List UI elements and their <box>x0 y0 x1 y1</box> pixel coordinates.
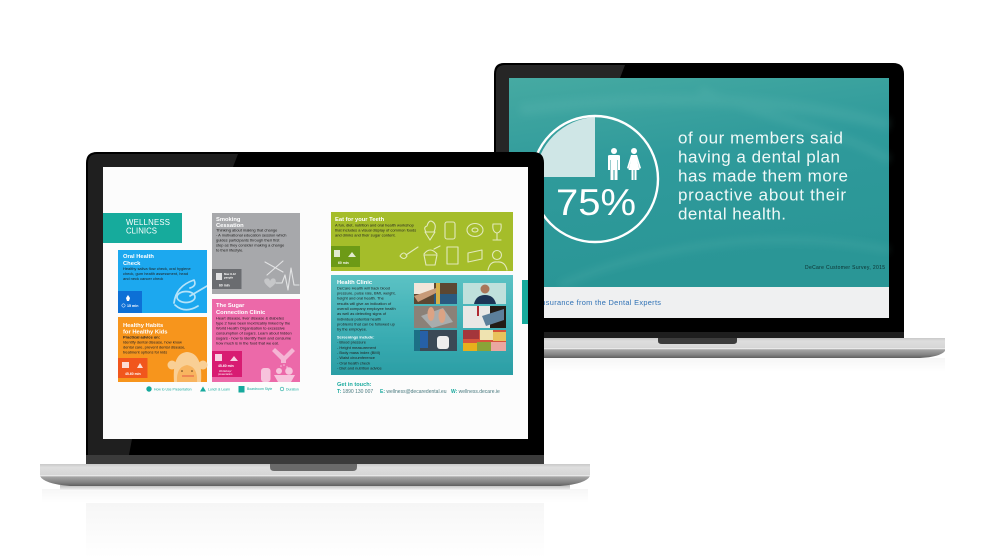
panel: health clinic: - Diet and nutrition advice <box>337 366 382 370</box>
background swooshes <box>520 90 889 285</box>
panel: oral health check <box>118 250 207 313</box>
icon: child face <box>168 352 208 382</box>
icon: sugar pouring into bowl <box>261 348 295 382</box>
front laptop <box>40 152 590 486</box>
panel: eat for your teeth: and drinks and their sugar content. <box>335 232 396 238</box>
statement text: has made them more <box>678 166 848 185</box>
panel: health clinic <box>331 275 513 375</box>
panel: health clinic: DeCare Health will track blood <box>337 286 390 290</box>
icon: woman <box>627 148 641 180</box>
panel: eat for your teeth: A fun, diet, nutrition and oral health workshop <box>335 222 415 228</box>
panel: health clinic: Health Clinic <box>337 280 373 286</box>
photo: shopping <box>414 330 457 351</box>
panel: oral health check: and neck cancer check <box>123 276 163 281</box>
statement text: dental health. <box>678 204 786 223</box>
pie chart: 75 percent <box>532 116 658 242</box>
photo: blood pressure check <box>463 306 506 328</box>
panel: smoking cessation: guides participants through their first <box>216 238 280 242</box>
panel: health clinic: pressure, pulse rate, BMI, weight, <box>337 290 396 296</box>
side tab <box>522 280 528 324</box>
photo: waist measurement <box>414 283 457 304</box>
panel: healthy habits for healthy kids: Practical advice on: <box>123 334 160 340</box>
panel: health clinic: as well as detecting signs of <box>337 311 387 316</box>
statement text: proactive about their <box>678 185 846 204</box>
front laptop reflection <box>42 485 588 558</box>
highlighted quarter <box>535 117 595 177</box>
time badge <box>212 351 242 377</box>
panel: the sugar connection clinic: consumption of sugars. Learn about hidden <box>216 330 292 336</box>
panel: health clinic: - Body mass index (BMI) <box>337 350 381 355</box>
bezel glare <box>496 65 625 338</box>
time badge: 60 min <box>219 284 230 288</box>
panel: the sugar connection clinic: how much is in the food that we eat. <box>216 340 279 346</box>
time badge <box>331 246 360 267</box>
photo: food <box>463 330 506 351</box>
legend: lunch and learn <box>200 386 230 392</box>
panel: healthy habits for healthy kids: Healthy Habits <box>123 323 163 329</box>
panel: the sugar connection clinic <box>212 299 300 382</box>
panel: the sugar connection clinic: Connection Clinic <box>216 310 266 316</box>
legend: boardroom style <box>238 386 272 392</box>
legend: duration <box>280 387 299 392</box>
back laptop <box>494 63 945 372</box>
icon: mouth and toothbrush <box>174 280 207 310</box>
panel: health clinic: problems that can be followed up <box>337 322 396 326</box>
heading banner: Wellness Clinics: WELLNESS <box>126 218 170 227</box>
shadow below base <box>60 485 570 491</box>
panel: eat for your teeth: Eat for your Teeth <box>335 217 385 223</box>
bezel glare <box>88 154 238 455</box>
panel: health clinic: by the employee. <box>337 327 367 332</box>
contact details <box>337 389 500 395</box>
panel: health clinic: - Oral health check <box>337 360 370 365</box>
heading banner: Wellness Clinics <box>103 213 182 243</box>
panel: smoking cessation: Thinking about making that change <box>216 228 278 232</box>
heading banner: Wellness Clinics: CLINICS <box>126 226 157 236</box>
photo: man <box>463 283 506 304</box>
footer text: Insurance from the Dental Experts <box>539 298 661 307</box>
time badge: 15 min <box>127 304 138 308</box>
panel: oral health check: Oral Health <box>123 254 154 260</box>
panel: the sugar connection clinic: type 2 have been inextricably linked by the <box>216 320 291 326</box>
panel: health clinic: - Waist circumference <box>337 355 376 360</box>
time badge: 45-60 min <box>218 364 234 368</box>
panel: health clinic: overall company employee health <box>337 306 396 311</box>
panel: the sugar connection clinic: sugars - how to identify them and consume <box>216 336 292 340</box>
panel: health clinic: results will give an indication of <box>337 301 392 306</box>
back screen teal panel <box>509 78 889 287</box>
panel: smoking cessation: - A motivational education session which <box>216 232 286 238</box>
panel: smoking cessation: Cessation <box>216 223 244 229</box>
panel: the sugar connection clinic: The Sugar <box>216 303 245 309</box>
front laptop base <box>40 464 590 486</box>
hinge strip <box>520 332 904 338</box>
time badge: presentation <box>218 372 233 376</box>
contact block <box>337 382 500 395</box>
panel: oral health check: Check <box>123 261 141 267</box>
time badge: people <box>224 276 233 280</box>
panel: health clinic: - Height measurement <box>337 345 377 350</box>
front laptop notch <box>270 464 357 471</box>
screen footer strip <box>509 287 889 318</box>
legend: lunch and learn: Lunch & Learn <box>208 388 230 392</box>
food icons <box>400 221 507 270</box>
icon: man <box>608 148 620 180</box>
panel: smoking cessation: Smoking <box>216 217 241 223</box>
panel: smoking cessation: to their lifestyle. <box>216 248 243 252</box>
contact details: T: 1890 130 007 <box>337 389 373 395</box>
legend: how to use: How to Use Presentation <box>154 388 192 392</box>
panel: smoking cessation: step as they consider making a change <box>216 242 285 248</box>
front screen <box>103 167 528 439</box>
panel: oral health check: check, gum health assessment, head <box>123 271 188 276</box>
legend row <box>146 386 299 392</box>
back laptop bezel <box>494 63 904 338</box>
panel: eat for your teeth <box>331 212 513 271</box>
panel: healthy habits for healthy kids: dental care, prevent dental disease, <box>123 344 185 350</box>
panel: health clinic: Screenings include: <box>337 334 374 340</box>
back laptop base <box>520 338 945 358</box>
back laptop reflection <box>545 358 945 372</box>
contact heading: Get in touch: <box>337 382 372 388</box>
survey source: DeCare Customer Survey, 2015 <box>805 265 885 271</box>
statement text: having a dental plan <box>678 147 840 166</box>
panel: smoking cessation <box>212 213 300 294</box>
statement text <box>678 128 848 223</box>
panel: the sugar connection clinic: Heart disease, liver disease & diabetes <box>216 316 284 320</box>
time badge: 45-60 min <box>125 372 141 376</box>
legend: how to use <box>146 386 192 392</box>
legend: duration: Duration <box>286 388 299 392</box>
panel: the sugar connection clinic: World Health Organisation to excessive <box>216 326 286 330</box>
photo: feet on scale <box>414 306 457 328</box>
time badge: 60 min <box>338 261 349 265</box>
circle outline <box>532 116 658 242</box>
hinge strip <box>86 455 544 464</box>
panel: healthy habits for healthy kids <box>118 317 208 382</box>
statistic: 75%: 75% <box>556 181 636 223</box>
time badge <box>212 269 242 289</box>
statement text: of our members said <box>678 128 843 147</box>
time badge: Max 8-12 <box>224 272 236 276</box>
panel: oral health check: Healthy saliva flow check, oral hygiene <box>123 266 191 271</box>
icon: cigarette and heartbeat <box>264 261 299 290</box>
panel: eat for your teeth: that includes a visual display of common foods <box>335 228 416 232</box>
panel: health clinic: height and oral health. The <box>337 296 385 301</box>
panel: healthy habits for healthy kids: for Healthy Kids <box>123 330 167 336</box>
contact details: W: wellness.decare.ie <box>451 389 500 395</box>
panel: healthy habits for healthy kids: Identify dental disease, how know <box>123 340 182 344</box>
base reflection <box>42 489 588 503</box>
bezel reflection <box>86 503 544 558</box>
back laptop notch <box>658 338 737 344</box>
time badge: Workshop/ <box>219 369 232 373</box>
panel: health clinic: individual potential health <box>337 316 381 321</box>
contact details: E: wellness@decaredental.eu <box>380 389 447 395</box>
legend: boardroom style: Boardroom Style <box>247 387 272 391</box>
panel: healthy habits for healthy kids: treatment options for kids <box>123 350 167 354</box>
front laptop bezel <box>86 152 544 464</box>
panel: health clinic: - Blood pressure <box>337 340 367 344</box>
